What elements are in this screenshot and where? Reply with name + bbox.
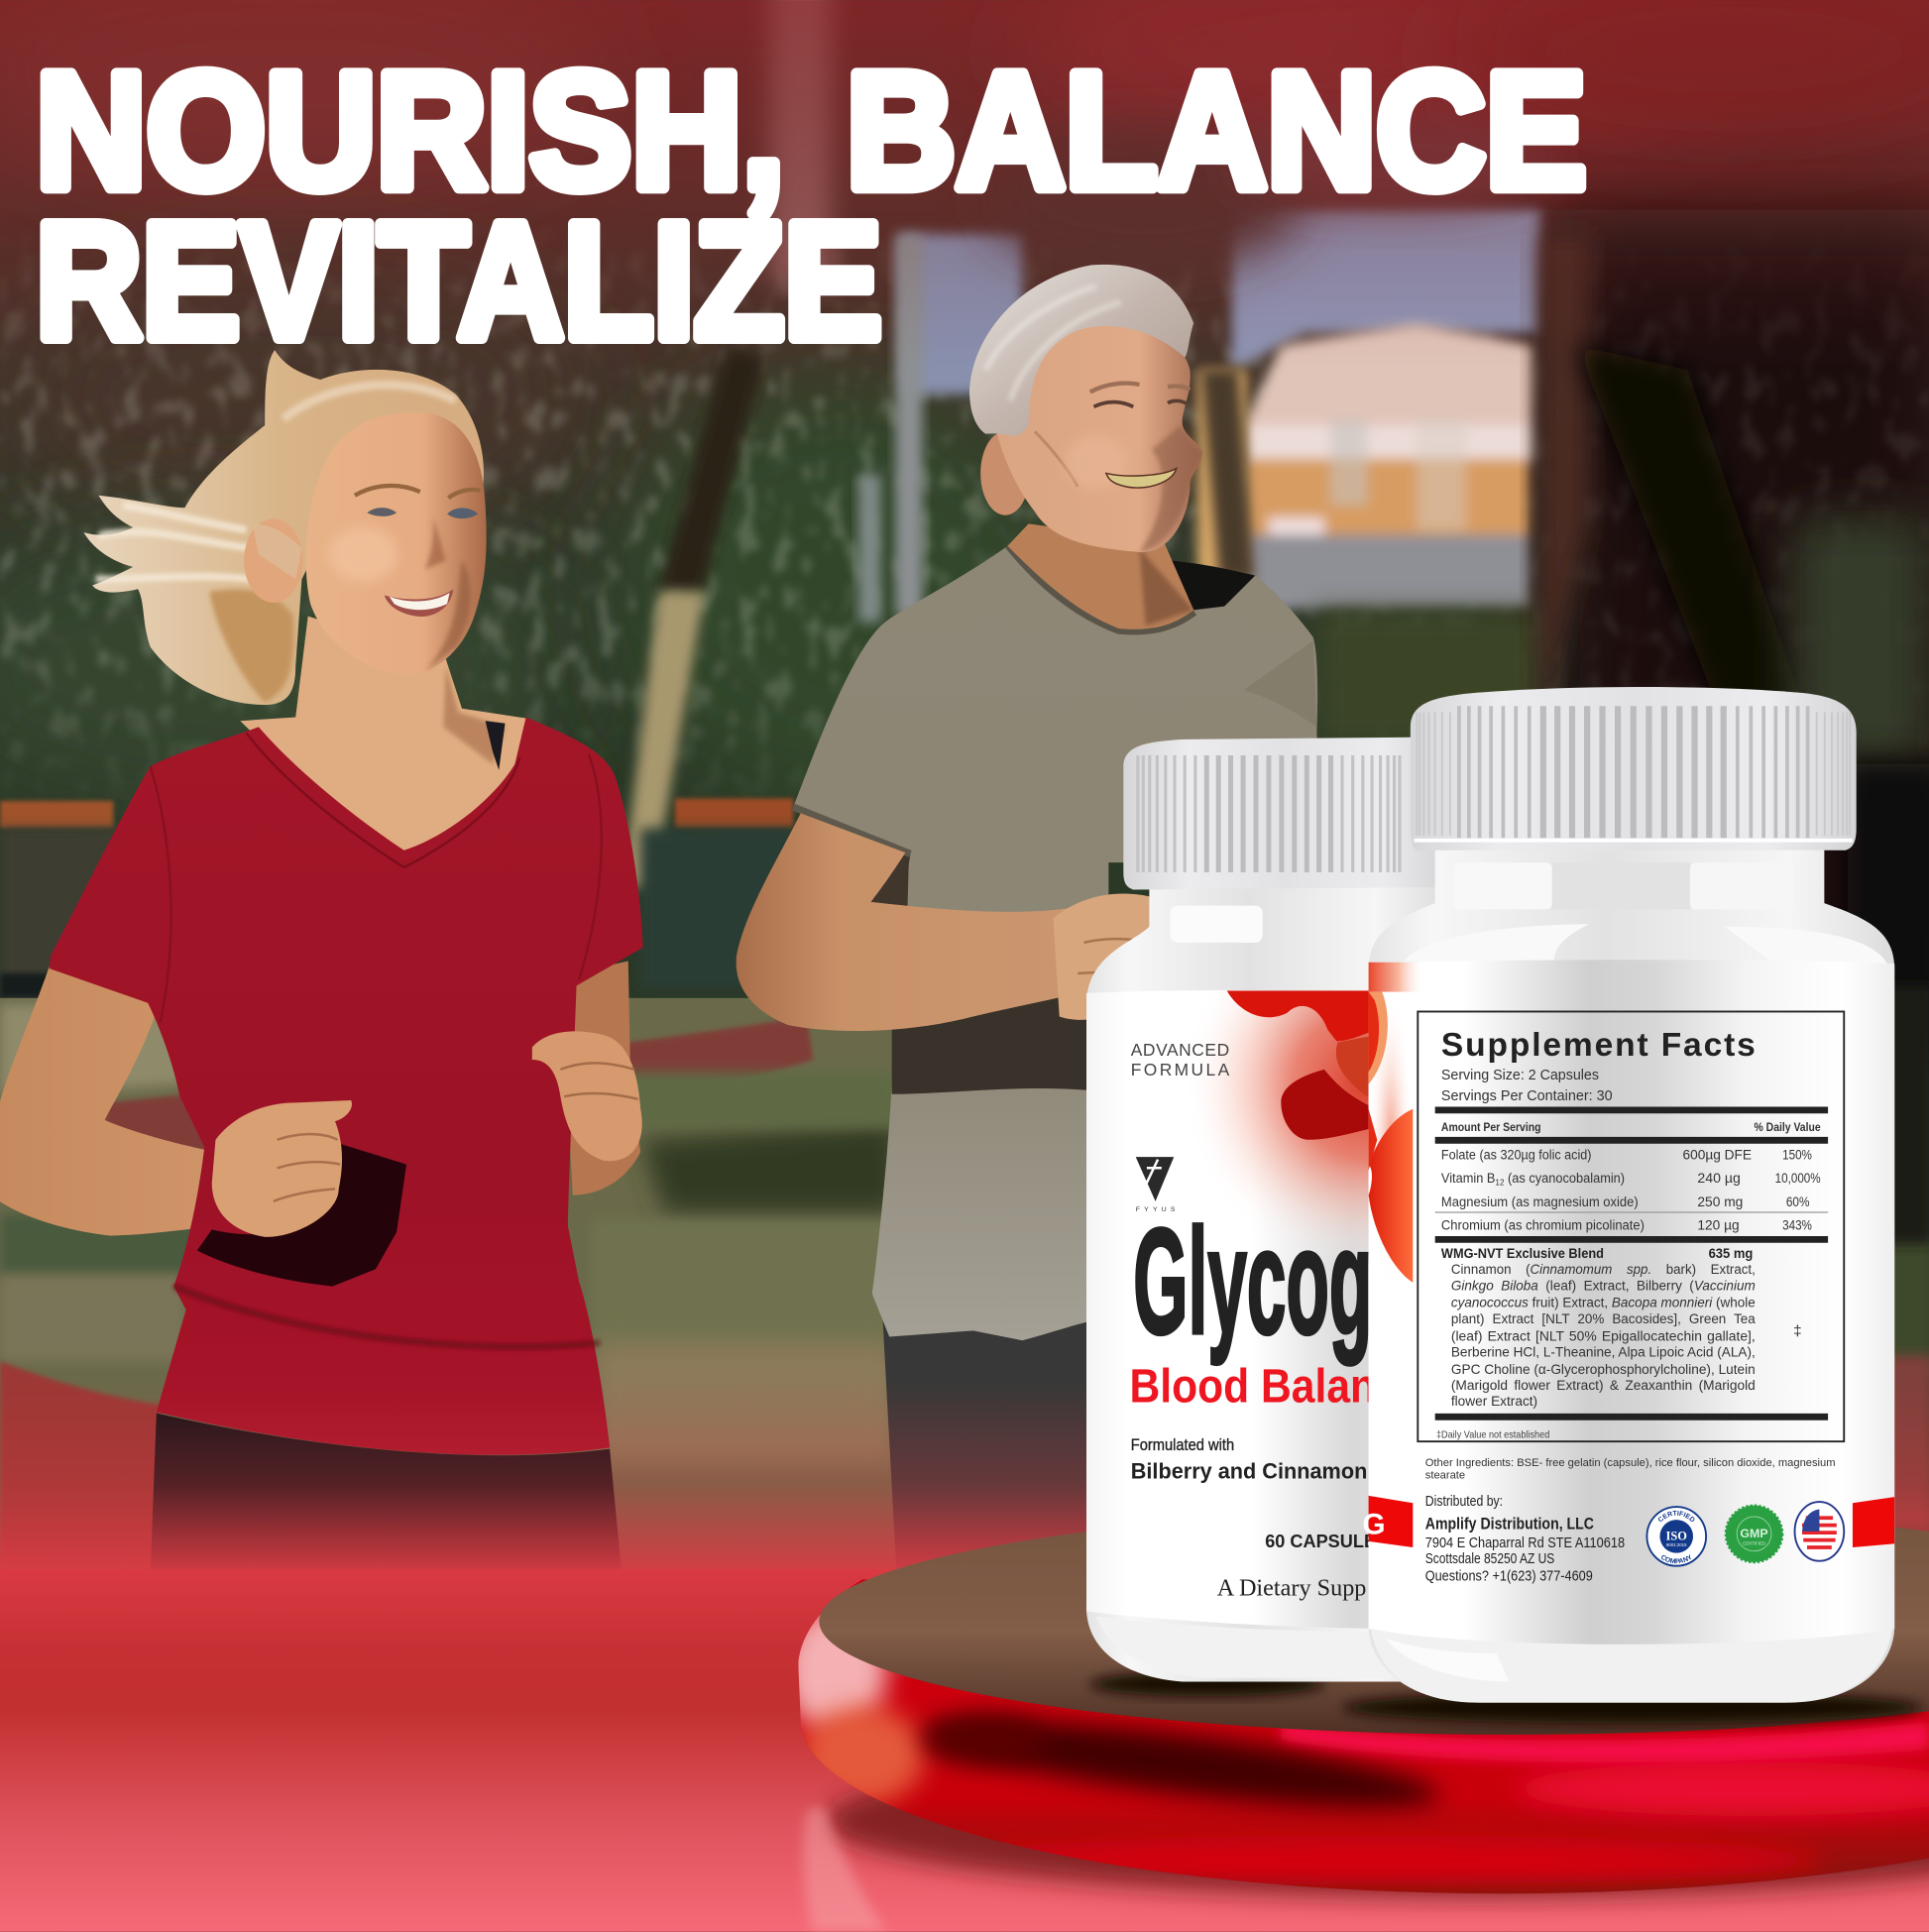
- panel: ingredients list: Ginkgo Biloba (leaf) Extract, Bilberry (Vaccinium: [1451, 1278, 1756, 1293]
- panel: vitamin rows: (as cyanocobalamin): [1504, 1171, 1625, 1186]
- red fade over lower background: [0, 1380, 1929, 1571]
- platform: top surface: [819, 1508, 1929, 1735]
- woman: right arm: [569, 962, 640, 1195]
- panel: column headers: % Daily Value: [1755, 1120, 1821, 1134]
- badge: ISO certified: CERTIFIED: [1658, 1511, 1695, 1522]
- title: BALANCE: [847, 39, 1587, 223]
- front bottle: neck: [1405, 862, 1887, 964]
- back bottle: advanced formula: ADVANCED: [1131, 1040, 1229, 1060]
- panel: vitamin rows: 600µg DFE: [1682, 1148, 1752, 1163]
- platform shadow and reflection on floor: [804, 1745, 1929, 1932]
- panel: heading: Supplement Facts: [1441, 1027, 1756, 1064]
- panel: ingredients list: flower Extract): [1451, 1394, 1537, 1409]
- badge: ISO certified: [1645, 1506, 1707, 1567]
- front bottle: supplement facts panel: [1418, 1011, 1844, 1441]
- back bottle: Glycog: [1133, 1198, 1372, 1366]
- badge: USA flag: [1795, 1502, 1844, 1561]
- red floor: [0, 1569, 1929, 1932]
- panel: exclusive blend: [1441, 1246, 1753, 1261]
- panel: ingredients list: cyanococcus fruit) Extract, Bacopa monnieri (whole: [1451, 1296, 1756, 1310]
- front bottle: other ingredients: stearate: [1425, 1469, 1465, 1481]
- man: trousers: [882, 1306, 1096, 1577]
- front bottle: distributor: Distributed by:: [1425, 1494, 1503, 1510]
- back bottle: advanced formula: FORMULA: [1131, 1060, 1230, 1080]
- back bottle: dietary supplement: A Dietary Supp: [1217, 1574, 1366, 1601]
- back bottle: base gloss: [1096, 1617, 1417, 1678]
- back bottle: advanced formula: [1131, 1040, 1230, 1080]
- woman: back hair: [84, 350, 484, 705]
- front bottle: body: [1369, 847, 1894, 1703]
- woman: trousers: [151, 1414, 623, 1577]
- man: face: [991, 323, 1202, 552]
- platform: side: [798, 1579, 1929, 1893]
- panel: serving info: Serving Size: 2 Capsules: [1441, 1068, 1599, 1083]
- man: hand: [1053, 893, 1152, 1020]
- back bottle: [1086, 738, 1435, 1681]
- woman: right fist: [532, 1031, 642, 1161]
- panel: vitamin rows: [1441, 1148, 1821, 1232]
- panel: serving info: Servings Per Container: 30: [1441, 1088, 1613, 1104]
- back bottle: logo: [1136, 1157, 1176, 1213]
- badge: ISO certified: 9001:2015: [1666, 1542, 1687, 1547]
- woman: left upper arm: [0, 949, 215, 1236]
- panel: vitamin rows: Chromium (as chromium picolinate): [1441, 1217, 1645, 1232]
- panel: vitamin rows: 12: [1495, 1178, 1505, 1188]
- woman: neck and chest: [240, 617, 532, 881]
- panel: exclusive blend: 635 mg: [1709, 1246, 1753, 1261]
- woman running: [0, 350, 643, 1577]
- panel: vitamin rows: 240 µg: [1697, 1171, 1741, 1186]
- front bottle: other ingredients: [1425, 1457, 1836, 1481]
- woman: face: [306, 412, 487, 674]
- panel: ingredients list: Cinnamon (Cinnamomum spp. bark) Extract,: [1451, 1262, 1756, 1277]
- man: ear: [980, 431, 1030, 515]
- back bottle: tagline: Formulated with: [1131, 1435, 1234, 1454]
- panel: vitamin rows: Magnesium (as magnesium oxide): [1441, 1194, 1639, 1209]
- back bottle: label: [1086, 990, 1417, 1629]
- panel: box: [1418, 1011, 1844, 1441]
- back bottle: tagline: Bilberry and Cinnamon: [1131, 1458, 1367, 1483]
- panel: vitamin rows: 343%: [1782, 1217, 1812, 1232]
- panel: double dagger: ‡: [1793, 1323, 1802, 1339]
- back bottle: logo: FYYUS: [1136, 1206, 1176, 1213]
- panel: footnote: ‡Daily Value not established: [1436, 1429, 1549, 1440]
- woman: red t-shirt: [50, 717, 643, 1455]
- back bottle: body: [1086, 881, 1447, 1681]
- panel: serving info: [1441, 1068, 1613, 1104]
- ground: grass and running track: [0, 985, 1929, 1577]
- panel: exclusive blend: WMG-NVT Exclusive Blend: [1441, 1246, 1604, 1261]
- man: arm: [737, 813, 1084, 1031]
- man: hair: [969, 265, 1193, 435]
- front bottle: red artwork at left edge: [1369, 963, 1424, 1288]
- back bottle: tagline: [1131, 1435, 1367, 1483]
- front bottle: label: [1369, 960, 1894, 1645]
- man running: [737, 265, 1324, 1577]
- front bottle: red bands: [1362, 1496, 1894, 1547]
- badge: GMP certified: [1726, 1506, 1782, 1562]
- panel: vitamin rows: Folate (as 320µg folic acid): [1441, 1148, 1592, 1163]
- front bottle: base gloss: [1371, 1629, 1892, 1703]
- back bottle: capsule count: 60 CAPSULE: [1265, 1531, 1376, 1551]
- man: t-shirt: [793, 546, 1324, 1340]
- woman: hand shadow on shirt: [197, 1143, 406, 1287]
- panel: vitamin rows: 120 µg: [1697, 1217, 1740, 1232]
- panel: ingredients list: GPC Choline (α-Glycerophosphorylcholine), Lutein: [1451, 1362, 1756, 1377]
- panel: ingredients list: (leaf) Extract [NLT 50% Epigallocatechin gallate],: [1451, 1328, 1756, 1343]
- man: smile: [1106, 468, 1177, 488]
- back bottle: neck highlight: [1171, 906, 1263, 943]
- red round platform: [783, 1508, 1929, 1893]
- front bottle: distributor: [1425, 1494, 1625, 1585]
- panel: vitamin rows: 250 mg: [1697, 1194, 1743, 1209]
- front bottle: distributor: 7904 E Chaparral Rd STE A110618: [1425, 1535, 1625, 1551]
- panel: column headers: Amount Per Serving: [1441, 1120, 1541, 1134]
- front bottle: other ingredients: Other Ingredients: BSE- free gelatin (capsule), rice flour, silicon dioxide, magnesium: [1425, 1457, 1836, 1469]
- title: REVITALIZE: [36, 189, 882, 374]
- badge: GMP certified: CERTIFIED: [1743, 1541, 1765, 1546]
- front bottle: distributor: Scottsdale 85250 AZ US: [1425, 1551, 1554, 1567]
- front bottle: red bands: G: [1362, 1508, 1386, 1540]
- panel: ingredients list: (Marigold flower Extract) & Zeaxanthin (Marigold: [1451, 1378, 1756, 1393]
- badge: GMP certified: GMP: [1740, 1527, 1768, 1540]
- back bottle: red artwork: [1208, 990, 1368, 1237]
- panel: ingredients list: plant) Extract [NLT 20% Bacosides], Green Tea: [1451, 1311, 1756, 1326]
- man: neck: [1007, 523, 1193, 629]
- fence: [0, 798, 801, 1005]
- title: NOURISH,: [36, 39, 785, 223]
- panel: vitamin rows: Vitamin B: [1441, 1171, 1499, 1186]
- panel: column headers: [1441, 1120, 1821, 1134]
- panel: vitamin rows: 10,000%: [1775, 1171, 1821, 1186]
- badge: ISO certified: ISO: [1666, 1530, 1687, 1543]
- building in background: [1244, 323, 1533, 609]
- front bottle: distributor: Questions? +1(623) 377-4609: [1425, 1569, 1593, 1585]
- title: [36, 39, 1587, 374]
- front bottle: cap: [1411, 687, 1857, 851]
- back bottle: cap: [1123, 737, 1447, 889]
- panel: ingredients list: [1451, 1262, 1756, 1409]
- back bottle: sub name: Blood Balan: [1130, 1359, 1376, 1413]
- front bottle: [1362, 687, 1895, 1703]
- woman: left fist: [212, 1100, 352, 1237]
- panel: vitamin rows: 60%: [1786, 1194, 1809, 1209]
- panel: vitamin rows: 150%: [1782, 1148, 1812, 1163]
- front bottle: distributor: Amplify Distribution, LLC: [1425, 1515, 1594, 1533]
- panel: rules: [1435, 1110, 1828, 1417]
- panel: ingredients list: Berberine HCl, L-Theanine, Alpa Lipoic Acid (ALA),: [1451, 1344, 1756, 1359]
- badge: ISO certified: COMPANY: [1661, 1554, 1691, 1564]
- woman: smile: [385, 589, 453, 617]
